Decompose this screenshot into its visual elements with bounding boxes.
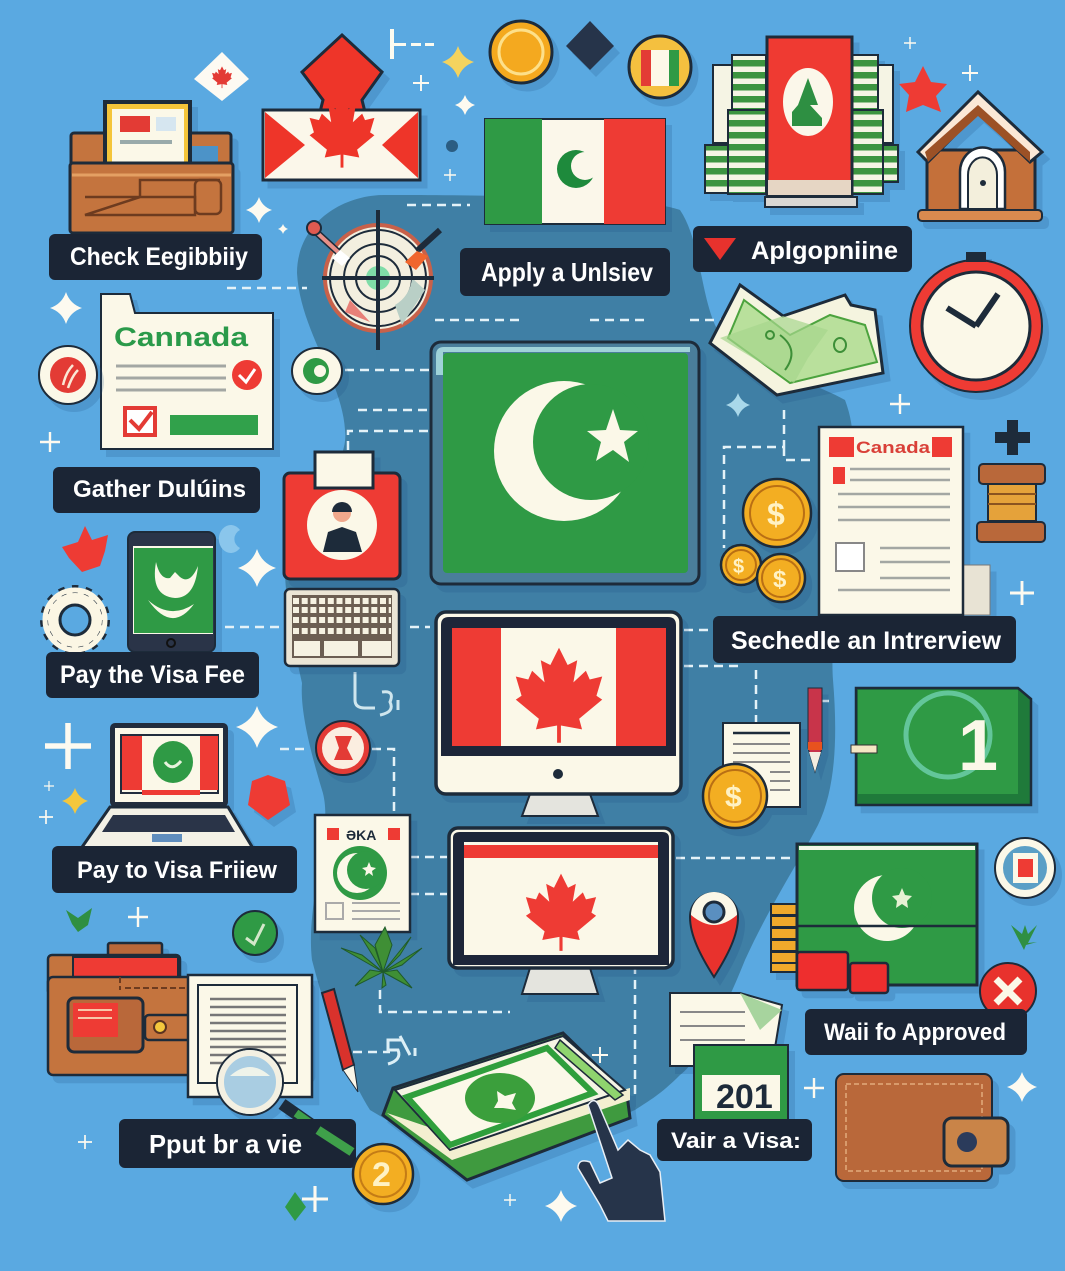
icon: gold coin number 2	[353, 1144, 413, 1204]
label: apply a visa	[460, 248, 670, 296]
icon: briefcase with document	[70, 102, 233, 233]
icon: small green leaf left	[66, 908, 92, 932]
icon: phone with crescent	[128, 532, 215, 652]
icon: contract document Canada: Cannada	[114, 322, 249, 352]
label: wait for approved	[805, 1009, 1027, 1055]
icon: red seal and red badge	[248, 721, 370, 820]
label: put for a visa	[119, 1119, 356, 1168]
text: dollar symbols: $	[767, 496, 785, 532]
icon: map pin	[690, 892, 738, 977]
icon: notepad, pen, coin	[703, 688, 822, 828]
icon: wallet	[836, 1074, 1008, 1181]
icon: document with magnifier	[188, 975, 345, 1148]
icon: notepad, pen, coin: $	[725, 781, 742, 814]
label: check eligibility	[49, 234, 262, 280]
icon: money stack	[383, 1033, 630, 1180]
label: gather documents: Gather Dulúins	[73, 476, 246, 503]
monitor: Pakistan flag	[431, 342, 699, 584]
icon: laptop with flag	[80, 723, 254, 850]
label: application	[693, 226, 912, 272]
icon: gear	[44, 589, 106, 651]
icon: faint crescent	[219, 525, 240, 553]
icon: diamond leaf badge	[194, 52, 249, 101]
icon: green handle overlap	[318, 1130, 352, 1152]
icon: green flag card	[770, 844, 977, 993]
icon: red star	[899, 66, 947, 112]
label: put for a visa: Pput br a vie	[149, 1129, 302, 1159]
icon: flag green and red with crescent	[485, 119, 665, 224]
icon: clock	[910, 252, 1042, 392]
icon: green book with number 1	[851, 688, 1031, 805]
glyph mark near keyboard	[355, 672, 398, 715]
label: vair a visa: Vair a Visa:	[671, 1128, 801, 1153]
icon: document Canada: Canada	[856, 438, 931, 457]
label: schedule an interview: Sechedle an Intrerview	[731, 627, 1002, 655]
label: wait for approved: Waii fo Approved	[824, 1019, 1006, 1046]
icon: gavel	[977, 420, 1045, 542]
connector lines	[225, 205, 835, 1100]
glyph mark near pen	[388, 1036, 415, 1064]
icon: red X badge	[980, 963, 1036, 1019]
icon: money stacks and red booklet	[705, 37, 898, 207]
label: schedule an interview	[713, 616, 1016, 663]
icon: money note and calendar: 201	[716, 1078, 773, 1116]
icon: pointing hand	[578, 1101, 665, 1221]
icon: visa document with crescent: ƏKA	[346, 827, 376, 843]
icon: red pen	[322, 989, 358, 1092]
icon: ID badge	[284, 452, 400, 579]
text: dollar symbols	[733, 496, 787, 593]
label: apply a visa: Apply a Unlsiev	[481, 257, 653, 287]
text: dollar symbols: $	[773, 566, 787, 593]
small dashed mark top	[390, 29, 434, 59]
monitor: lower	[449, 828, 673, 994]
icon: contract document Canada	[101, 294, 273, 449]
icon: keyboard	[285, 589, 399, 666]
label: gather documents	[53, 467, 260, 513]
icon: document Canada	[819, 427, 990, 615]
icon: gold coin number 2: 2	[372, 1156, 391, 1194]
icon: green book with number 1: 1	[958, 706, 998, 786]
label: pay to visa: Pay to Visa Friiew	[77, 857, 277, 884]
label: application: Aplgopniine	[751, 237, 898, 265]
icon: target with pins	[307, 210, 440, 350]
icon: green check circle	[233, 911, 277, 955]
label: pay the visa fee: Pay the Visa Fee	[60, 661, 245, 689]
label: pay the visa fee	[46, 652, 259, 698]
icon: gold coins	[721, 479, 811, 602]
label: pay to visa	[52, 846, 297, 893]
icon: house	[918, 92, 1042, 221]
monitor: Canada flag	[436, 612, 681, 816]
icon: money note and calendar	[670, 993, 788, 1121]
icon: banknotes top	[710, 285, 883, 395]
icon: visa document with crescent	[315, 815, 410, 932]
label: vair a visa	[657, 1119, 812, 1161]
label: check eligibility: Check Eegibbiiy	[70, 243, 248, 271]
icon: stop badge	[995, 838, 1055, 898]
icon: envelope with maple leaf	[263, 35, 420, 180]
icon: coins and diamond	[490, 21, 691, 98]
icon: green circular badge	[292, 348, 342, 394]
icon: cannabis leaf	[341, 927, 422, 988]
icon: wallet and folder	[48, 943, 308, 1075]
text: dollar symbols: $	[733, 556, 744, 578]
icon: dark dot	[446, 140, 458, 152]
icon: red star left	[62, 526, 108, 572]
central dark map shape	[285, 195, 853, 1175]
icon: small green leaf right	[1011, 925, 1037, 950]
icon: small green diamond	[285, 1192, 306, 1221]
icon: red circular badge	[39, 346, 97, 404]
